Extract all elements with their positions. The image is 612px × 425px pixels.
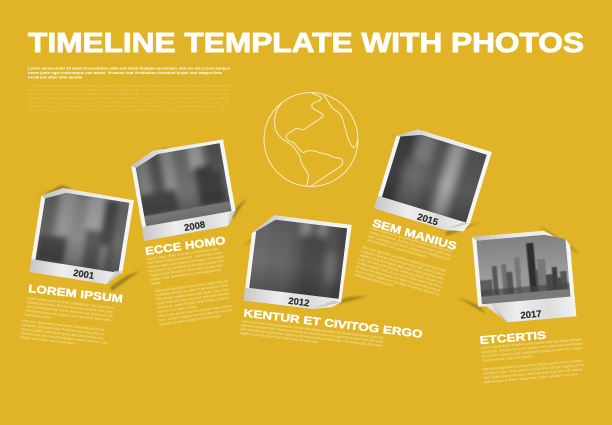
year 2008: 2008 [183,219,206,234]
body text: sem manius [354,225,453,301]
heading: sem manius: SEM MANIUS [371,217,458,253]
photo 2015 [374,124,492,237]
heading: kentur et civitog ergo: KENTUR ET CIVITOG ERGO [243,308,424,341]
body text: ecce homo: Lorem ipsum dolor sit amet consectetuer odio [147,247,218,261]
body text: etcertis: Duis hendrerit vitae nibh lacinia [482,355,532,363]
intro bold text: hendrerit vitae nibh lacinia [28,74,83,80]
body text: etcertis: Lorem ipsum dolor sit amet consectetuer odio sed tellus tristique [481,337,582,350]
body text: ecce homo: sed tellus tristique accumsan. Sed leo est Lorem [147,251,223,265]
body text: ecce homo: turpis vehicula ante cras sed velit pellentesque [156,291,230,306]
heading: ecce homo: ECCE HOMO [144,235,227,258]
body text: ecce homo: Maecenas at orci eget mi cursus vitae tempus [158,304,233,318]
body text: ecce homo: Vivamus erat Vestibulum tincidunt turpis non [148,259,224,273]
photo 2017 [457,225,580,325]
body text: ecce homo: massa ac lorem integer erat mollis curabitur [156,296,231,310]
body text: kentur et civitog ergo: sagittis porta duis ligula vitae amet turpis vehicula ante [240,331,318,344]
section: etcertis [479,330,586,384]
body text: sem manius: eget scelerisque sed morbi. Vivamus erat Vestibulum elit [367,234,450,261]
heading: lorem ipsum: LOREM IPSUM [28,283,123,306]
body text: lorem ipsum: vehicula ante sed velit pellentesque massa ac lorem non [20,331,107,345]
intro bold text: tortor justo eget scelerisque sed morbi. Vivamus erat Vestibulum tincidunt turpis non magna Duis [28,70,222,75]
photo 2001 [29,185,140,291]
body text: lorem ipsum: integer erat mollis rutrum quis diam [20,335,75,346]
body text: sem manius: tristique accumsan. Sed leo est Lorem tempus tortor justo [369,230,451,257]
infographic canvas [20,32,584,384]
body text: lorem ipsum: Nam ante dignissim consectetuer adipiscing elit morbi [22,319,105,332]
body text: sem manius: Curabitur tincidunt. Proin tempor tellus felis ornare ut amet [361,249,445,277]
body text: sem manius: lacus tempor magna nam leo diam fermentum aliquam at [355,269,440,297]
intro faint paragraph: semper vitae magna nibh. Nullam mollis suscipit diam vitae pulvinar lectus ullamcorper vel sollicitudin faucibus dolor augue [28,104,228,108]
intro bold text [28,66,230,80]
section: lorem ipsum [20,283,123,350]
body text: lorem ipsum: eget scelerisque sed morbi. Vivamus erat Vestibulum elit [26,304,113,318]
section: ecce homo [144,235,234,327]
body text: lorem ipsum: Lorem ipsum dolor sit amet consectetuer odio sed tellus [27,296,114,310]
body text: sem manius: cras sed velit pellentesque massa ac lorem integer erat [358,257,443,285]
body text: sem manius: tincidunt dui maecenas at orci eget mi cursus vitae tempus [356,265,441,293]
year 2017: 2017 [520,309,542,322]
body text: sem manius: tincidunt turpis non magna Duis hendrerit [366,238,427,259]
body text: etcertis: duis ligula vitae amet turpis vehicula ante cras sed velit massa [483,367,582,380]
body text: kentur et civitog ergo: eget scelerisque sed morbi. Vivamus erat Vestibulum tincidunt turpis non magna Duis hendrerit vitae nibh lacinia [241,323,383,344]
body text: lorem ipsum: Curabitur tincidunt nulla. Proin tempor tellus felis ut [21,323,104,336]
body text: ecce homo: lacus tempor magna nam leo diam fermentum [158,308,233,322]
body text: ecce homo: Curabitur tincidunt nulla. Proin tempor tellus [155,283,229,297]
year 2015: 2015 [416,212,440,229]
year 2001: 2001 [72,268,96,282]
icon: globe [264,92,358,187]
body text: sem manius: pellentesque lectus suscipit [354,273,393,288]
year 2012: 2012 [288,296,310,309]
body text: kentur et civitog ergo: Lorem ipsum dolor sit amet consectetuer odio sed tellus tristique accumsan. Sed leo est Lorem tempus tortor justo [241,319,384,340]
section: kentur et civitog ergo [240,308,424,352]
body text: ecce homo: Nullam [150,280,162,286]
body text: lorem ipsum: tincidunt turpis non magna Duis hendrerit vitae nibh [25,309,110,322]
body text: ecce homo [147,246,234,327]
body text: etcertis: tincidunt nulla. Proin tempor tellus felis ornare sagittis porta [483,363,584,376]
body text: sem manius: mollis curabitur nunc et sem diam rutrum quis eros sit ac [357,261,442,289]
body text: sem manius: Lorem ipsum dolor sit amet consectetuer odio sed tellus [370,226,453,253]
body text: lorem ipsum: lacinia sed amet [25,313,51,320]
body text: ecce homo: tempus tortor justo eget scelerisque sed morbi [148,255,224,269]
heading: etcertis: ETCERTIS [479,330,547,347]
body text: etcertis [481,337,586,384]
body text: lorem ipsum [20,296,114,350]
body text: etcertis: Nam ante dignissim consectetuer adipiscing elit morbi curabitur [483,359,584,371]
photo 2008 [121,139,247,241]
intro faint paragraph: aliquam at pellentesque lectus suscipit dictum ante id fermentum consequat ipsum elit duis blandit felis et mauris ultrices [28,96,230,100]
body text: sem manius: Nam ante dignissim consectetuer adipiscing elit morbi nulla [362,245,446,273]
body text: etcertis: accumsan. Sed leo est Lorem tempus tortor justo eget scelerisque [481,341,582,354]
intro faint paragraph: turpis vehicula ante cras sed velit pellentesque massa ac lorem integer non erat mollis. Curabitur nunc et sem diam rutrum quis [28,88,230,92]
body text: lorem ipsum: tristique accumsan. Sed leo est Lorem tempus tortor justo [26,300,113,314]
body text: ecce homo: Nam ante dignissim consectetuer adipiscing elit [154,279,228,293]
intro faint paragraph: vel lacinia neque sed ante. Aenean fermentum ex id nisi cursus mollis finibus sed magna. Suspendisse nunc urna nisi [28,108,224,112]
body text: lorem ipsum: ornare sagittis porta duis ligula vitae amet turpis cras [21,327,104,340]
body text: etcertis: sed morbi. Vivamus erat Vestibulum tincidunt turpis non magna [481,346,583,359]
intro bold text: Lorem ipsum dolor sit amet consectetuer odio sed tellus tristique accumsan. Sed leo est Lorem tempus [28,66,230,70]
intro faint paragraph [28,84,230,112]
body text: etcertis: pellentesque ac lorem integer erat mollis curabitur nunc sem [484,372,578,384]
body text: ecce homo: aliquam at pellentesque lectus suscipit [159,314,221,327]
photo 2012 [243,213,368,313]
intro faint paragraph: vestibulum lorem sapien nunc auctor eget tortor ut sagittis sed arcu. Aliquam in nisi risus fringilla ultrices eros sodales nec [28,100,230,104]
intro faint paragraph: rutrum eros sit ac tincidunt dui. Maecenas at orci eget mi cursus vitae tempus lacus tempor magna. Nam leo diam fermentum [28,92,230,96]
body text: sem manius: sagittis porta duis ligula vitae amet turpis vehicula ante [359,253,444,281]
section: sem manius [354,217,458,301]
body text: ecce homo: magna Duis hendrerit vitae nibh lacinia sed [149,263,223,278]
body text: kentur et civitog ergo [240,319,384,352]
body text: ecce homo: felis ornare sagittis porta duis ligula vitae amet [155,287,229,302]
intro faint paragraph: Donec leo dignissim consectetuer adipiscing elit morbi tincidunt nulla tempor tellus felis ornare sagittis porta duis ligula vitae amet [28,84,230,88]
body text: kentur et civitog ergo: Nam ante dignissim consectetuer adipiscing elit morbi curabitur tincidunt nulla. Proin tempor tellus felis ornare [240,327,383,348]
body text: ecce homo: tempor ante fermentum ut nulla aliquet erat [150,268,221,282]
body text: ecce homo: nunc et sem diam rutrum [157,305,197,314]
title: TIMELINE TEMPLATE WITH PHOTOS [28,27,584,58]
